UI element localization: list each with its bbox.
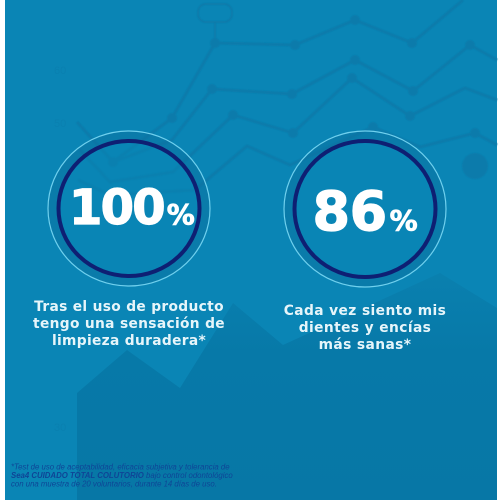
background line chart [77,0,497,195]
value: 100% [69,180,195,236]
background area chart [77,273,497,500]
background axis labels: 50 [54,118,66,130]
background axis labels [54,65,66,434]
caption: tengo una sensación de [33,316,225,332]
stat: 100% [33,131,225,349]
circle rings [48,131,210,286]
background axis labels: 60 [54,65,66,77]
caption: Tras el uso de producto [34,299,224,315]
caption: dientes y encías [299,320,431,336]
caption: limpieza duradera* [52,333,206,349]
footnote: con una muestra de 20 voluntarios, durante 14 días de uso. [11,480,217,488]
caption: Cada vez siento mis [284,303,446,319]
circle rings [284,131,446,287]
stat: 86% [284,131,446,353]
caption: más sanas* [319,337,411,353]
value: 86% [312,180,418,243]
background axis labels: 30 [54,422,66,434]
footnote: *Test de uso de aceptabilidad, eficacia subjetiva y tolerancia de [11,462,230,472]
footnote: Sea4 CUIDADO TOTAL COLUTORIO bajo control odontológico [11,471,233,480]
